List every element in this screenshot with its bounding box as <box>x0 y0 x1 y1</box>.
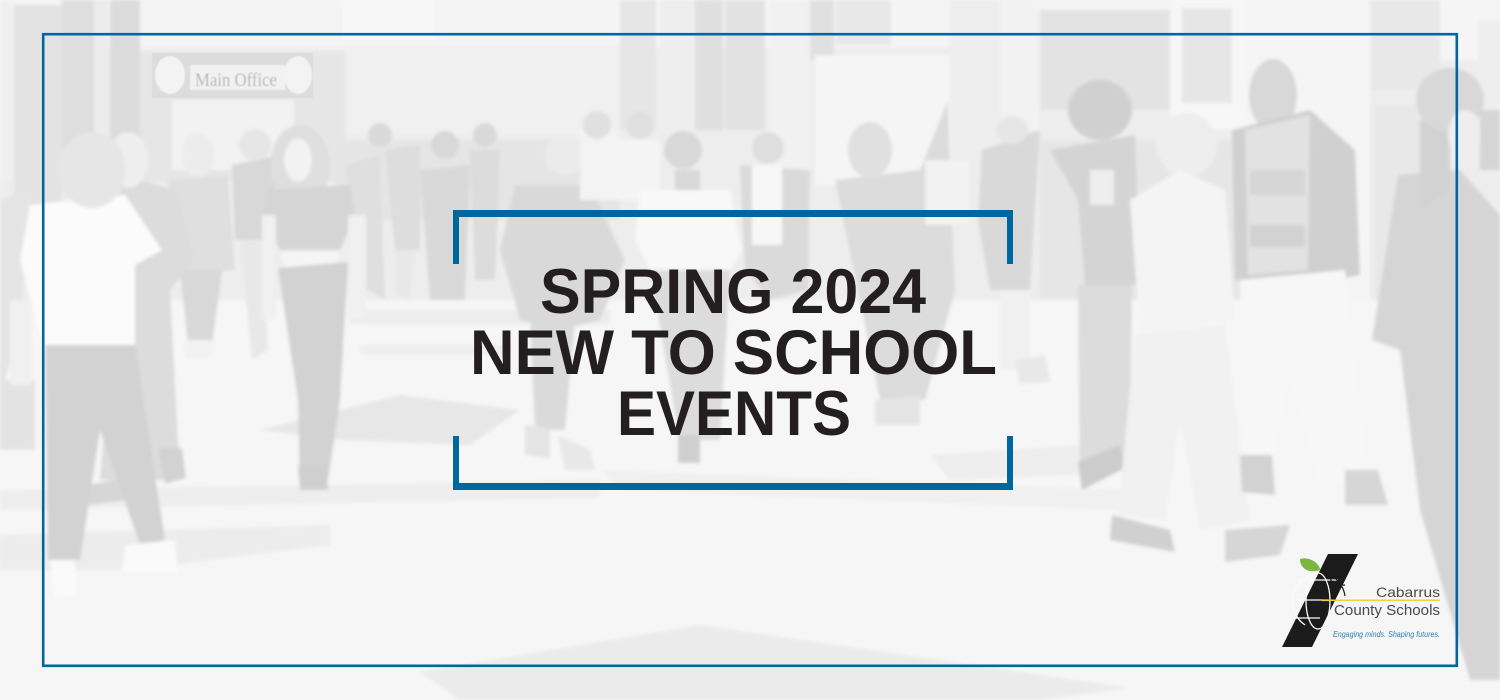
centre student in white <box>635 190 742 270</box>
logo text: Cabarrus <box>1376 584 1440 600</box>
dark student right <box>978 130 1040 290</box>
adidas student <box>1068 80 1132 140</box>
boy in polo <box>232 155 282 240</box>
logo text <box>1334 584 1440 619</box>
title: NEW TO SCHOOL <box>470 318 997 388</box>
main office sign: Main Office <box>195 70 277 91</box>
girl from back <box>20 195 162 355</box>
logo tagline: Engaging minds. Shaping futures. <box>1333 629 1440 639</box>
blond student <box>1157 113 1217 177</box>
title: SPRING 2024 <box>540 257 926 327</box>
logo mark: slash, globe and leaf <box>1282 554 1358 647</box>
students right of centre <box>740 165 810 300</box>
wall display screen <box>343 0 435 40</box>
left student edge <box>0 190 30 380</box>
door of main office <box>172 100 294 170</box>
main office sign <box>152 53 313 98</box>
graffiti shirt student <box>1249 59 1297 131</box>
girl in black top <box>270 125 330 205</box>
logo text: County Schools <box>1334 603 1440 619</box>
centre dark student <box>500 185 625 330</box>
title bracket <box>453 210 1013 490</box>
students in back near centre <box>580 130 620 200</box>
title <box>470 257 997 449</box>
floor <box>0 300 1500 700</box>
logo: Cabarrus County Schools <box>1282 554 1440 647</box>
hoodie girl <box>168 175 235 275</box>
student in knit hat <box>1478 20 1500 110</box>
crowd in the hallway <box>335 140 620 220</box>
grey hoodie behind <box>100 175 195 480</box>
title: EVENTS <box>617 379 851 449</box>
logo gold line <box>1322 600 1440 601</box>
